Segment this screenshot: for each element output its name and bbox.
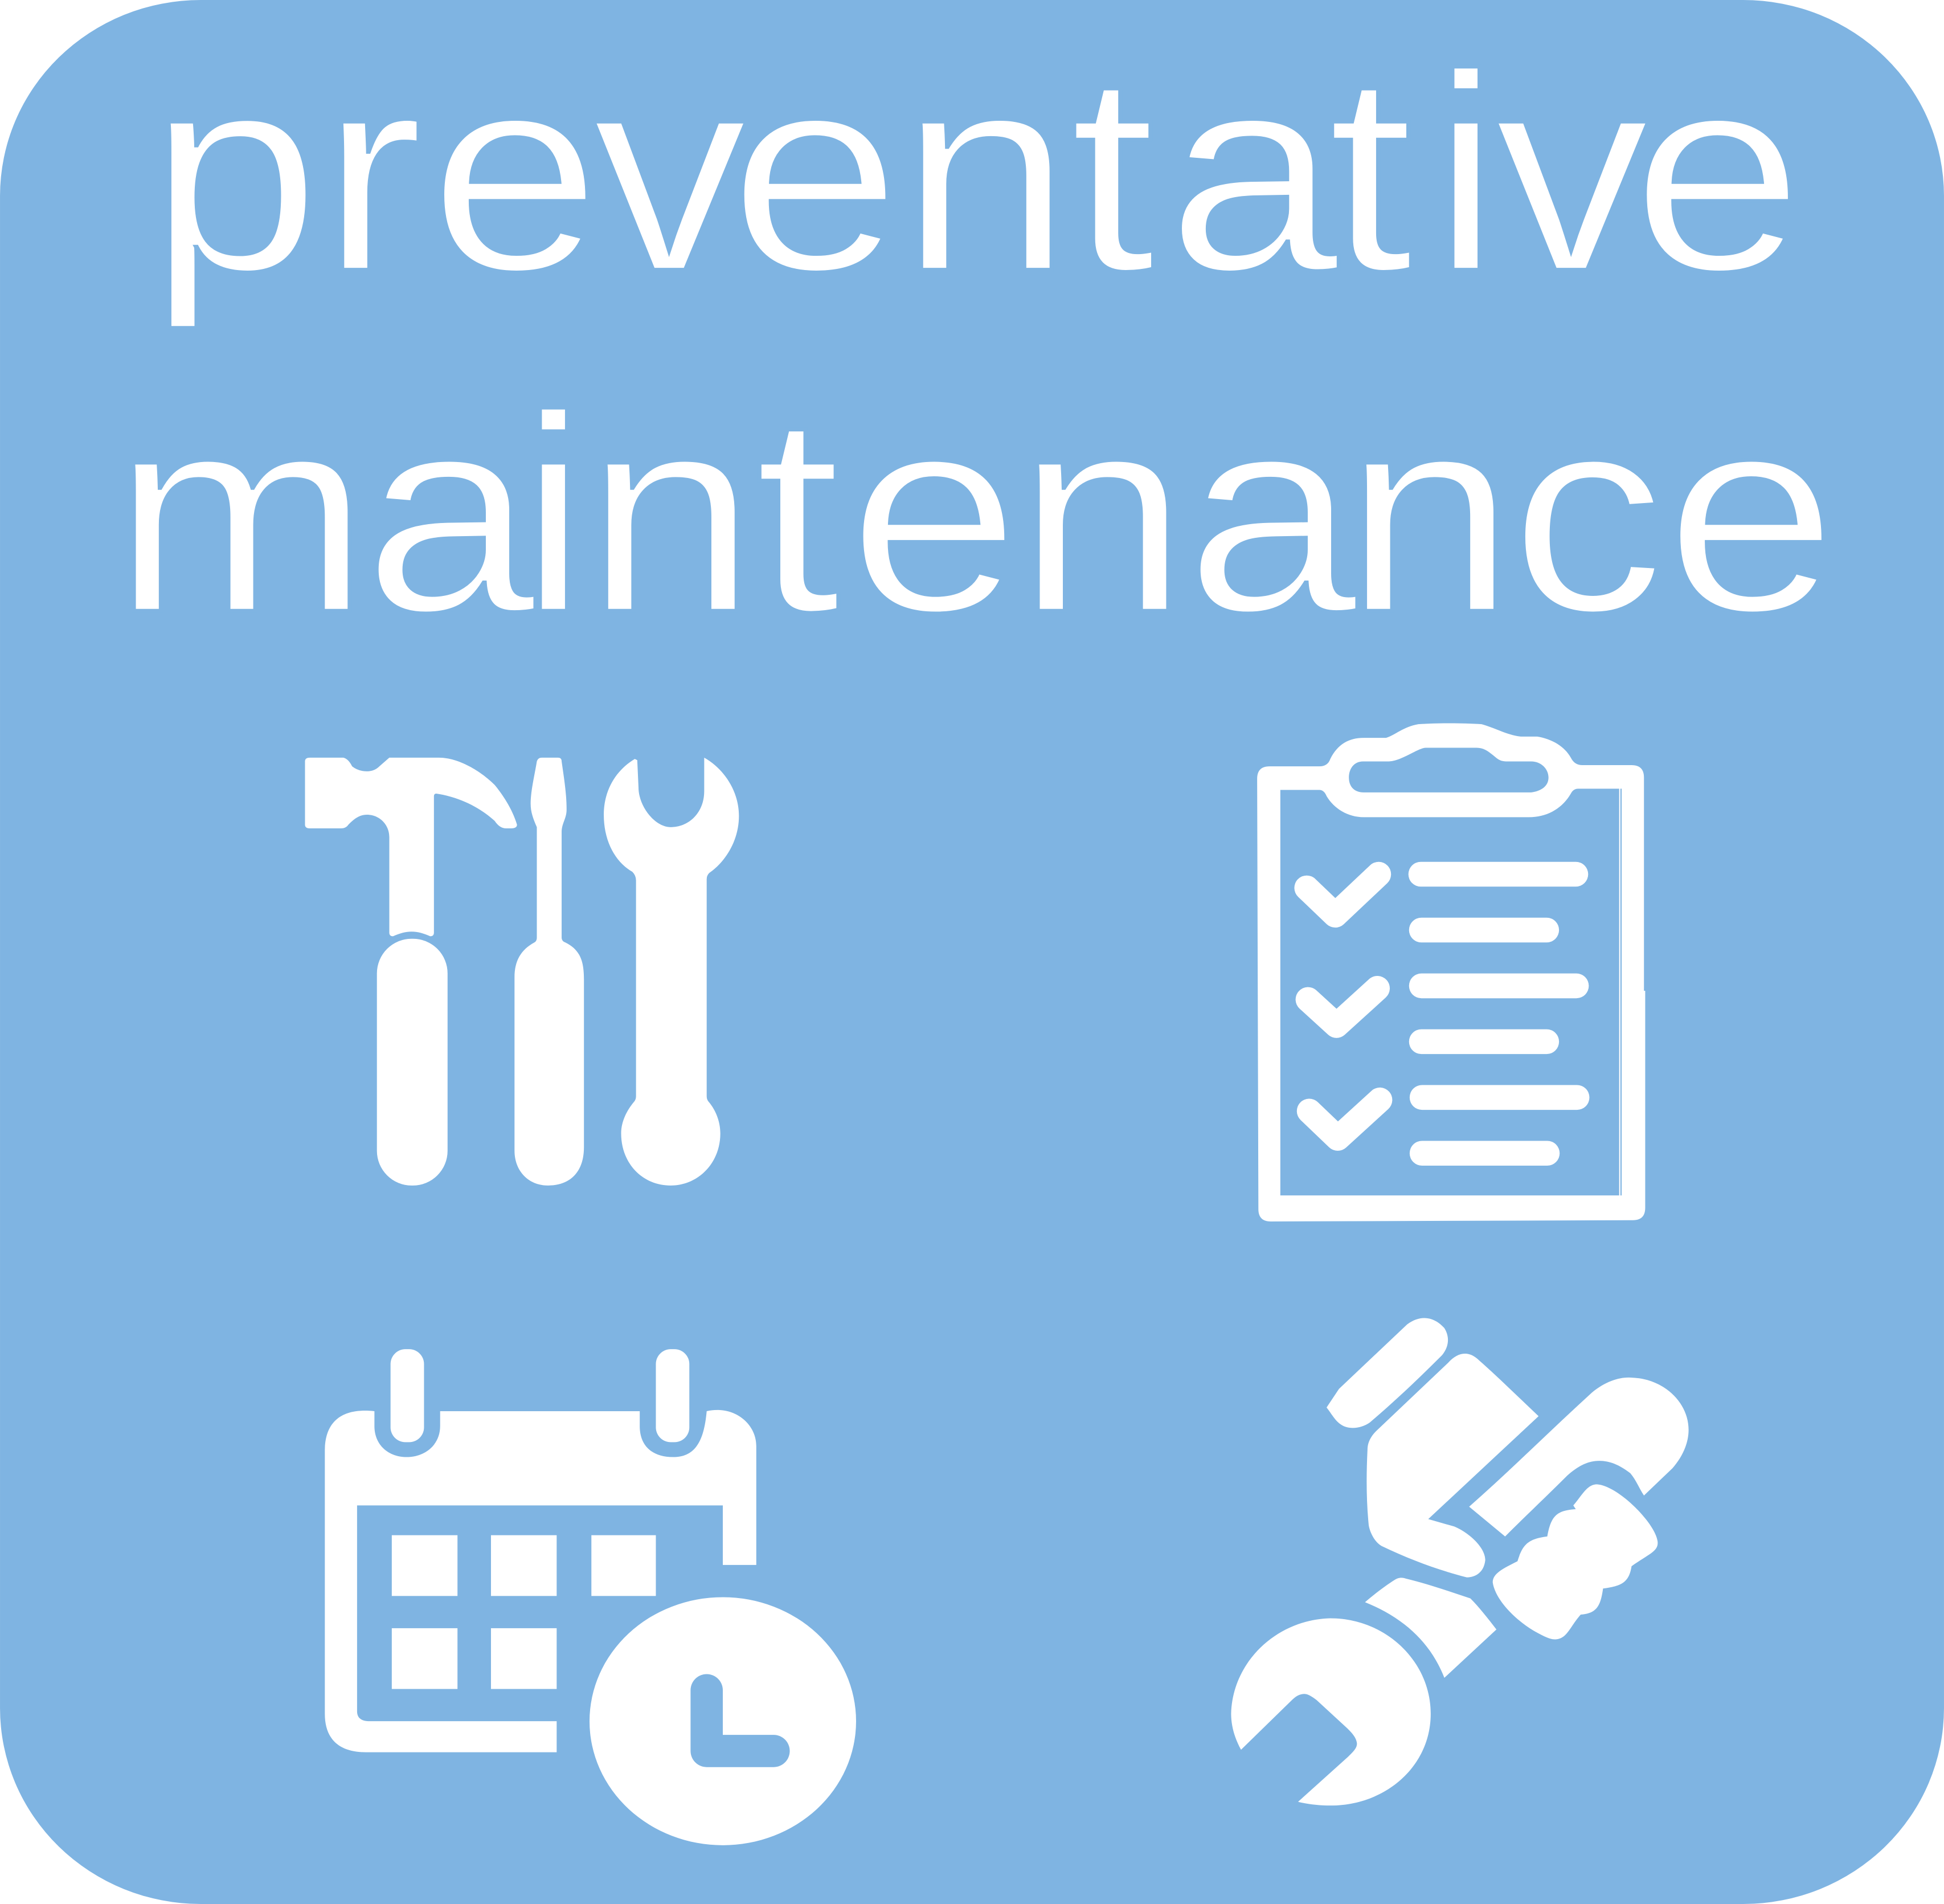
wrench big head (1231, 1619, 1431, 1805)
title: line two: maintenance (112, 357, 1837, 670)
icon: hammer handle (377, 939, 448, 1186)
checklist lines (1409, 862, 1589, 1166)
icon: adjustable wrench (1231, 1318, 1689, 1805)
calendar pegs (391, 1349, 424, 1442)
clock face (590, 1597, 856, 1845)
clipboard frame (1257, 724, 1645, 1221)
icon: tools (305, 758, 739, 1186)
icon: wrench (604, 758, 739, 1186)
wrench grip bar (1327, 1318, 1448, 1428)
clock hands (707, 1690, 773, 1751)
thin line on clipboard edge (1620, 788, 1622, 1195)
calendar date squares (392, 1535, 656, 1689)
title: line one: preventative (149, 16, 1804, 331)
wrench neck (1365, 1578, 1496, 1678)
icon: calendar with clock (325, 1349, 856, 1845)
checkmarks (1307, 875, 1380, 1138)
icon: clipboard checklist (1257, 724, 1645, 1221)
wrench top handle (1469, 1378, 1689, 1537)
calendar body (325, 1410, 756, 1752)
icon: screwdriver (514, 758, 584, 1186)
icon: hammer head (305, 758, 517, 936)
wrench adjusting knob (1493, 1484, 1657, 1640)
wrench upper jaw (1366, 1354, 1538, 1578)
